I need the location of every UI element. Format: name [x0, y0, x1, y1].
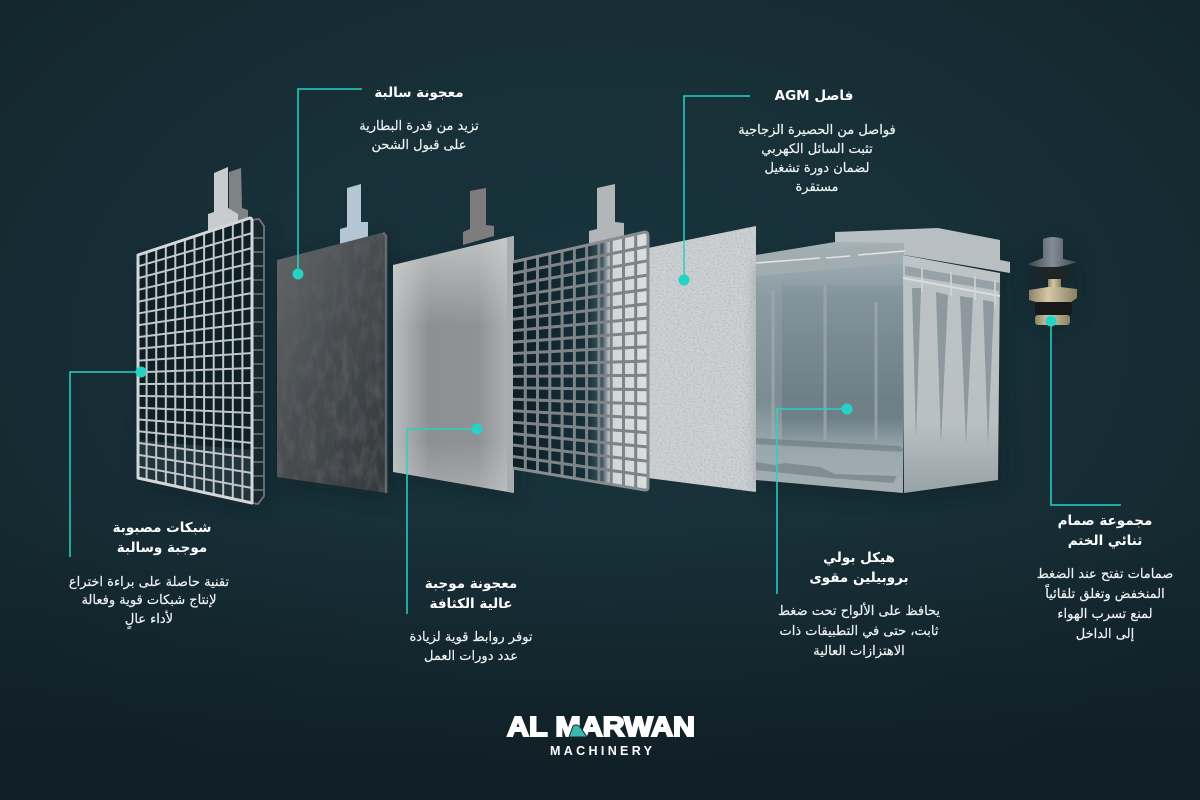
grid lines — [513, 235, 648, 488]
case inner shade — [782, 285, 904, 450]
dot — [842, 404, 852, 414]
heading: معجونة موجبة — [425, 576, 517, 592]
heading: معجونة سالبة — [374, 85, 464, 101]
dot — [1046, 316, 1056, 326]
plate body — [393, 236, 514, 493]
body text: تثبت السائل الكهربي — [761, 142, 873, 157]
heading — [425, 576, 517, 612]
heading: بروبيلين مقوى — [809, 570, 909, 586]
callout: AGM separator — [678, 88, 896, 286]
body text — [409, 630, 533, 664]
grid lines — [137, 221, 252, 501]
heading — [1058, 513, 1152, 549]
dot — [678, 274, 690, 286]
heading: عالية الكثافة — [430, 596, 512, 612]
case ribs — [912, 288, 994, 445]
body text: إلى الداخل — [1076, 627, 1134, 642]
leader — [1051, 321, 1121, 505]
body text — [69, 575, 229, 630]
body text: عدد دورات العمل — [424, 649, 518, 664]
body text: فواصل من الحصيرة الزجاجية — [738, 123, 896, 138]
heading: شبكات مصبوبة — [113, 520, 211, 536]
panel: negative paste plate — [277, 184, 390, 498]
case left face — [756, 232, 904, 493]
tab — [340, 184, 368, 244]
body text: المنخفض وتغلق تلقائياً — [1045, 584, 1165, 602]
slate body — [277, 232, 386, 493]
leader — [70, 372, 141, 557]
callout: valve — [1037, 316, 1173, 642]
leader — [777, 409, 847, 594]
body text: مستقرة — [795, 180, 839, 195]
case right face — [903, 255, 1000, 493]
body text: تزيد من قدرة البطارية — [359, 119, 479, 134]
heading: هيكل بولي — [823, 550, 895, 566]
body text: توفر روابط قوية لزيادة — [409, 630, 533, 645]
panel: positive paste plate — [393, 188, 517, 498]
heading: موجبة وسالبة — [117, 540, 207, 556]
dot — [472, 424, 482, 434]
body text — [738, 123, 896, 195]
leader — [298, 89, 362, 274]
callout: polypropylene case — [777, 404, 940, 659]
body text — [359, 119, 479, 153]
logo: AL MARWAN — [507, 711, 695, 742]
body text: لإنتاج شبكات قوية وفعالة — [81, 593, 217, 608]
body text: ثابت، حتى في التطبيقات ذات — [780, 624, 939, 639]
grid outer frame — [138, 218, 252, 503]
callout: cast grids — [69, 366, 229, 630]
body text: لمنع تسرب الهواء — [1057, 607, 1153, 622]
brass body — [1029, 287, 1077, 302]
heading: فاصل AGM — [775, 88, 853, 104]
case lid — [835, 228, 1010, 273]
leader — [684, 96, 750, 280]
logo: MACHINERY — [550, 744, 653, 758]
case top band — [905, 266, 1000, 291]
heading: ثنائي الختم — [1068, 533, 1142, 549]
panel: cast grid plate — [137, 167, 265, 510]
callout: positive paste — [407, 424, 533, 664]
callout: negative paste — [292, 85, 479, 280]
panel: polypropylene case — [756, 228, 1010, 500]
panel: valve — [1023, 237, 1083, 329]
lower seal — [1035, 302, 1072, 315]
body text: على قبول الشحن — [372, 138, 466, 153]
body text: تقنية حاصلة على براءة اختراع — [69, 575, 229, 590]
body text — [1037, 567, 1173, 642]
panel: cast grid with glass mat behind — [513, 184, 648, 490]
body text: لأداء عالٍ — [125, 610, 173, 630]
grid backing — [513, 232, 648, 490]
body text: لضمان دورة تشغيل — [765, 161, 869, 176]
body text: الاهتزازات العالية — [813, 644, 905, 659]
icon: teal fin — [569, 725, 587, 737]
heading — [809, 550, 909, 586]
tab — [463, 188, 494, 245]
grid side frame — [252, 219, 264, 504]
dot — [292, 268, 304, 280]
body text: صمامات تفتح عند الضغط — [1037, 567, 1173, 582]
panel: AGM separator — [648, 226, 756, 492]
dot — [136, 366, 146, 378]
heading: مجموعة صمام — [1058, 513, 1152, 529]
body text — [778, 602, 940, 659]
seals — [1037, 267, 1068, 280]
leader — [407, 429, 477, 614]
tab — [589, 184, 624, 245]
body text: يحافظ على الألواح تحت ضغط — [778, 602, 940, 619]
grid outer frame — [513, 232, 648, 490]
logo — [507, 711, 695, 758]
cap — [1028, 237, 1077, 267]
heading — [113, 520, 211, 556]
case base — [756, 438, 905, 483]
grid backing — [137, 218, 252, 503]
brass foot — [1035, 315, 1070, 325]
icon: grid lug — [208, 167, 248, 232]
